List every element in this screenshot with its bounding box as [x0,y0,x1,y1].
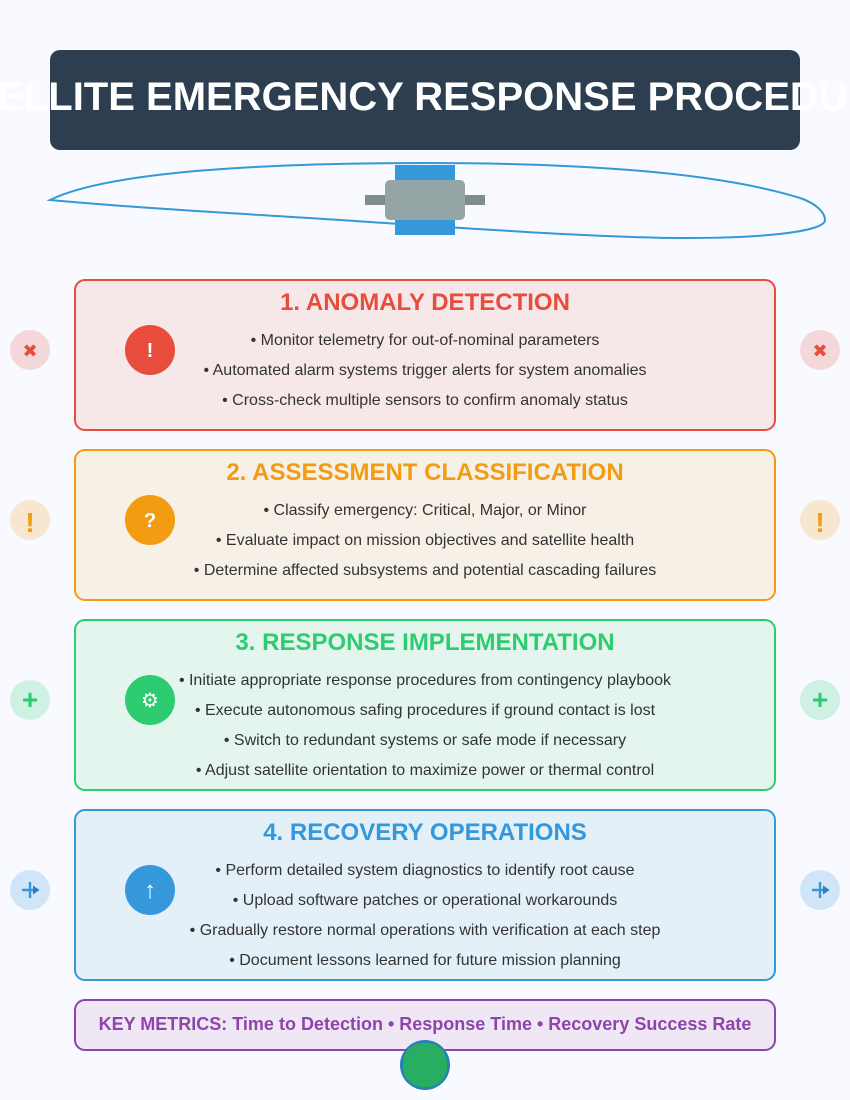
side icon: right plus [800,680,840,720]
side icon: left warning: ! [25,507,35,538]
title banner [0,50,850,150]
text: response steps [179,672,672,779]
side icon: right warning: ! [815,507,825,538]
text: anomaly detection steps: • Cross-check multiple sensors to confirm anomaly status [222,392,628,409]
icon: up arrow: ↑ [144,877,156,904]
icon: exclamation [125,325,175,375]
side icon: left plus: + [22,684,38,715]
text: anomaly detection steps: • Monitor telemetry for out-of-nominal parameters [251,332,599,349]
heading: recovery operations: 4. RECOVERY OPERATIONS [263,819,587,846]
text: recovery steps [190,862,660,969]
text: assessment steps: • Evaluate impact on mission objectives and satellite health [216,532,634,549]
icon: gear [125,675,175,725]
side icon: right plus arrow [800,870,840,910]
panel: anomaly detection [75,280,775,430]
panel: key metrics: KEY METRICS: Time to Detection • Response Time • Recovery Success Rate [99,1014,751,1034]
text: response steps: • Execute autonomous safing procedures if ground contact is lost [195,702,656,719]
panel: response implementation [75,620,775,790]
text: response steps: • Switch to redundant systems or safe mode if necessary [224,732,626,749]
orbit path [50,163,825,238]
side icon: right cross: ✖ [812,341,828,362]
text: response steps: • Adjust satellite orientation to maximize power or thermal control [196,762,654,779]
heading: assessment classification: 2. ASSESSMENT CLASSIFICATION [226,459,624,486]
text: recovery steps: • Document lessons learned for future mission planning [229,952,621,969]
side icon: left cross: ✖ [22,341,38,362]
icon: satellite [365,165,485,235]
heading: anomaly detection: 1. ANOMALY DETECTION [280,289,570,316]
side icon: left warning [10,500,50,540]
side icon: right warning [800,500,840,540]
text: anomaly detection steps [203,332,647,409]
text: assessment steps: • Determine affected subsystems and potential cascading failures [194,562,656,579]
icon: question mark [125,495,175,545]
panel: assessment classification [75,450,775,600]
icon: gear: ⚙ [141,688,159,712]
text: response steps: • Initiate appropriate response procedures from contingency playbook [179,672,672,689]
side icon: left plus [10,680,50,720]
icon: green status dot [400,1040,450,1090]
panel: key metrics [75,1000,775,1050]
side icon: left plus arrow [10,870,50,910]
text: recovery steps: • Perform detailed system diagnostics to identify root cause [215,862,635,879]
text: assessment steps: • Classify emergency: Critical, Major, or Minor [263,502,587,519]
side icon: left cross [10,330,50,370]
text: recovery steps: • Gradually restore normal operations with verification at each step [190,922,660,939]
icon: exclamation: ! [147,340,153,362]
heading: response implementation: 3. RESPONSE IMPLEMENTATION [235,629,615,656]
side icon: right plus: + [812,684,828,715]
panel: recovery operations [75,810,775,980]
text: anomaly detection steps: • Automated alarm systems trigger alerts for system anomalies [203,362,647,379]
side icon: right cross [800,330,840,370]
text: recovery steps: • Upload software patches or operational workarounds [233,892,617,909]
icon: up arrow [125,865,175,915]
icon: question mark: ? [144,510,156,532]
text: assessment steps [194,502,656,579]
